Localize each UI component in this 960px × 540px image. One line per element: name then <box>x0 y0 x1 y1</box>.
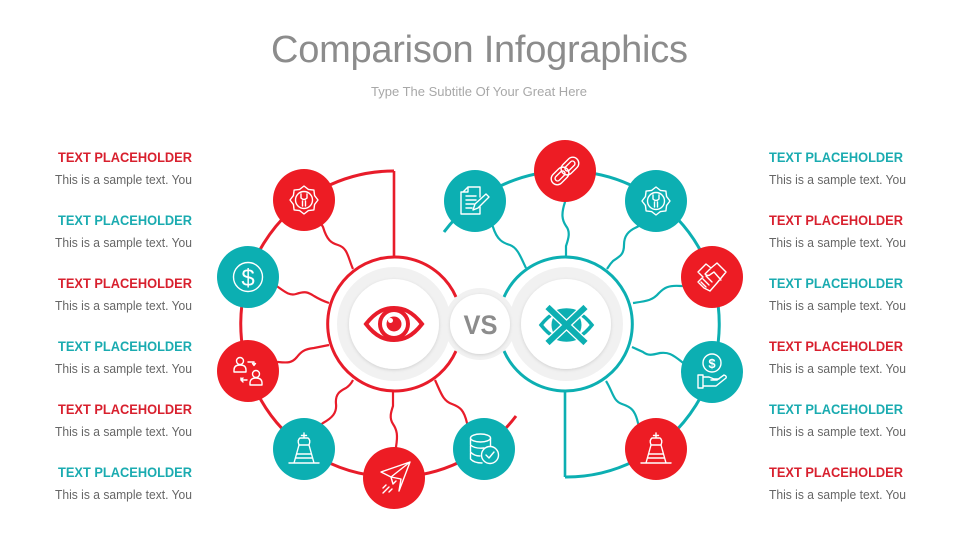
node: left gear <box>273 169 335 231</box>
right item 1: TEXT PLACEHOLDER <box>769 150 903 165</box>
left item 3 <box>55 276 192 313</box>
right item 4 <box>769 339 906 376</box>
right connector network <box>444 171 719 477</box>
node: left dollar <box>217 246 279 308</box>
right item 6: This is a sample text. You <box>769 488 906 502</box>
node: left chess <box>273 418 335 480</box>
subtitle: Type The Subtitle Of Your Great Here <box>371 84 587 99</box>
title: Comparison Infographics <box>271 29 688 71</box>
left item 6: TEXT PLACEHOLDER <box>58 465 192 480</box>
right item 4: This is a sample text. You <box>769 362 906 376</box>
left item 2 <box>55 213 192 250</box>
node: left dollar: $ <box>241 265 255 292</box>
right item 5: TEXT PLACEHOLDER <box>769 402 903 417</box>
right item 2: TEXT PLACEHOLDER <box>769 213 903 228</box>
vs badge <box>444 288 516 360</box>
left item 5: TEXT PLACEHOLDER <box>58 402 192 417</box>
right item 2: This is a sample text. You <box>769 236 906 250</box>
left hub <box>337 267 451 381</box>
right item 2 <box>769 213 906 250</box>
left item 3: This is a sample text. You <box>55 299 192 313</box>
left item 2: TEXT PLACEHOLDER <box>58 213 192 228</box>
right item 5 <box>769 402 906 439</box>
left item 1 <box>55 150 192 187</box>
right hub <box>509 267 623 381</box>
vs badge: VS <box>464 310 498 340</box>
right item 1 <box>769 150 906 187</box>
left item 5 <box>55 402 192 439</box>
right item 4: TEXT PLACEHOLDER <box>769 339 903 354</box>
left item 6: This is a sample text. You <box>55 488 192 502</box>
node: right document <box>444 170 506 232</box>
left item 3: TEXT PLACEHOLDER <box>58 276 192 291</box>
node: right gear <box>625 170 687 232</box>
node: left database <box>453 418 515 480</box>
right item 3 <box>769 276 906 313</box>
left item 2: This is a sample text. You <box>55 236 192 250</box>
node: right handshake <box>681 246 743 308</box>
left text list <box>55 150 192 502</box>
right text list <box>769 150 906 502</box>
node: right hand with coin <box>681 341 743 403</box>
right item 5: This is a sample text. You <box>769 425 906 439</box>
left item 1: TEXT PLACEHOLDER <box>58 150 192 165</box>
node: right hand with coin: $ <box>708 356 716 371</box>
left connector network <box>241 171 516 477</box>
icon: crossed eye <box>541 307 592 343</box>
right item 3: This is a sample text. You <box>769 299 906 313</box>
node: left team exchange <box>217 340 279 402</box>
left item 1: This is a sample text. You <box>55 173 192 187</box>
right item 1: This is a sample text. You <box>769 173 906 187</box>
right item 3: TEXT PLACEHOLDER <box>769 276 903 291</box>
left item 4: This is a sample text. You <box>55 362 192 376</box>
right item 6: TEXT PLACEHOLDER <box>769 465 903 480</box>
node: right chain link <box>534 140 596 202</box>
left item 4: TEXT PLACEHOLDER <box>58 339 192 354</box>
icon: open eye <box>366 308 422 340</box>
left item 6 <box>55 465 192 502</box>
node: right chess <box>625 418 687 480</box>
left item 5: This is a sample text. You <box>55 425 192 439</box>
left item 4 <box>55 339 192 376</box>
node: left paper plane <box>363 447 425 509</box>
right item 6 <box>769 465 906 502</box>
